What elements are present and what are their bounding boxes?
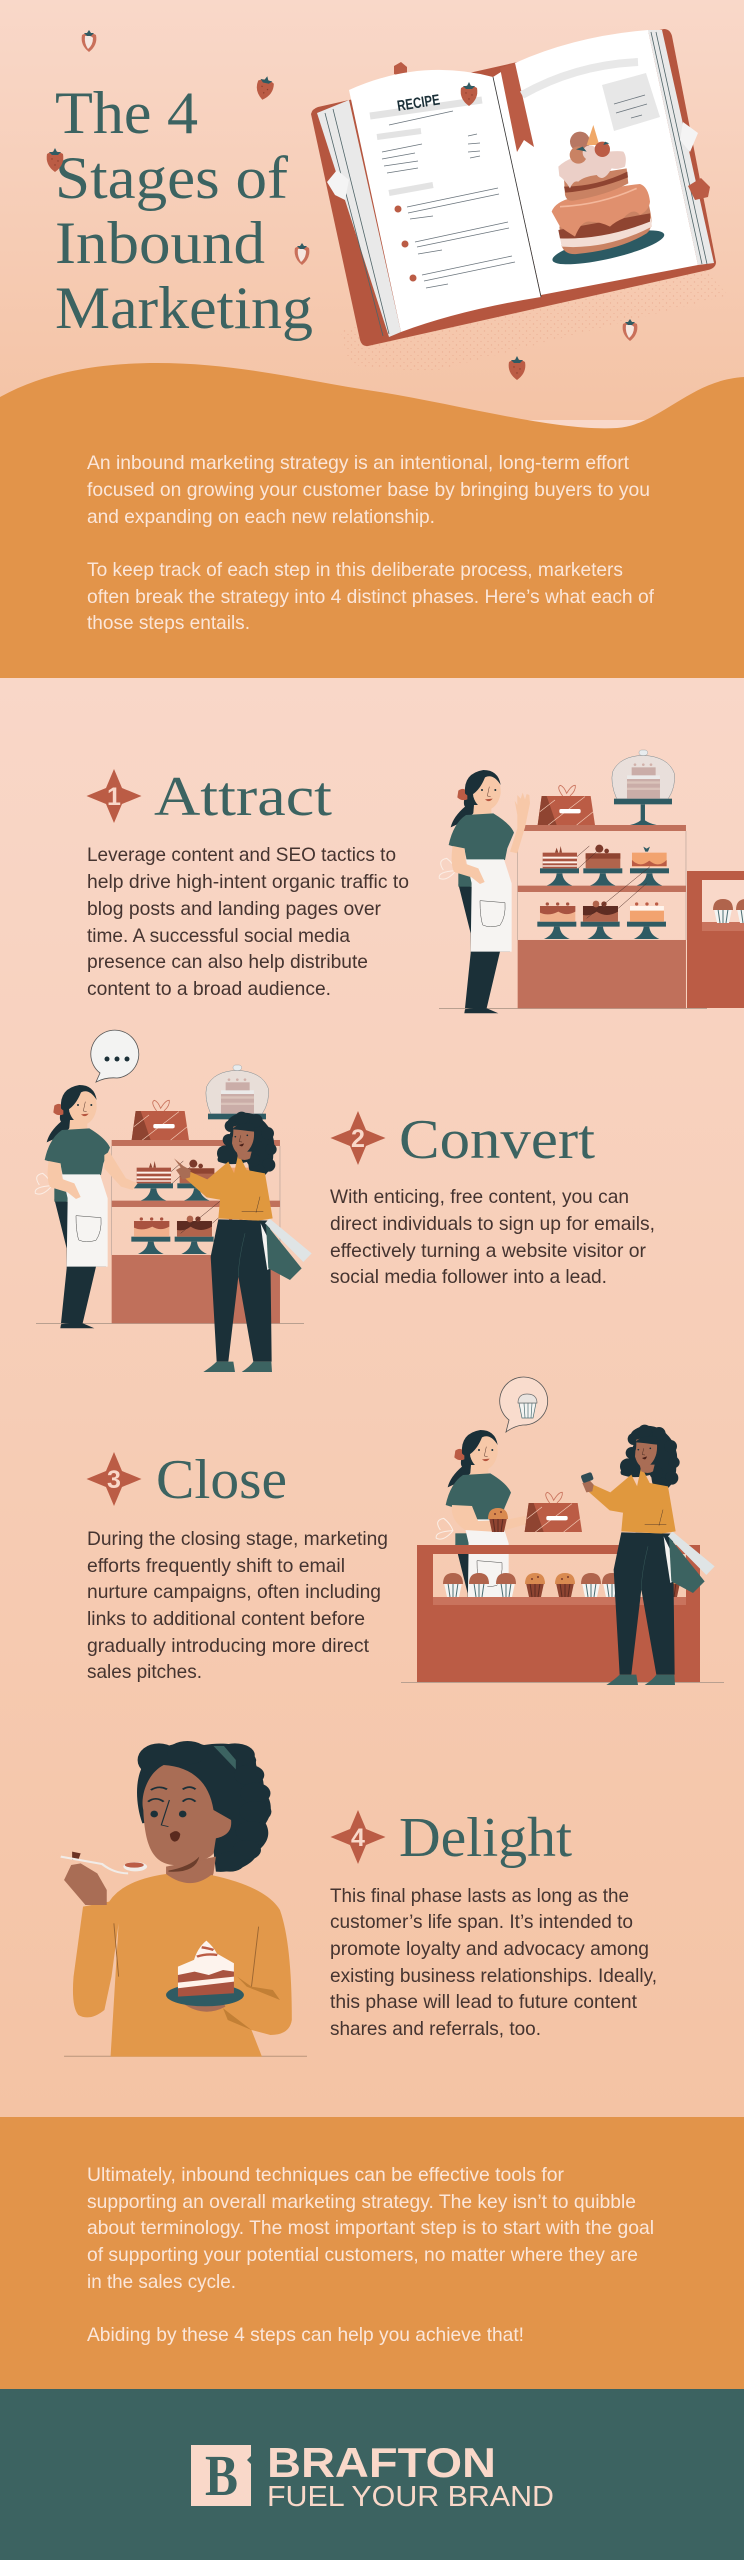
book label: recipe: RECIPE — [396, 91, 441, 115]
text block: attract: time. A successful social media — [87, 925, 350, 947]
text block: conclusion: in the sales cycle. — [87, 2271, 236, 2293]
icon: number 1 star: 1 — [107, 783, 121, 811]
heading: convert: Convert — [399, 1109, 595, 1171]
text block: intro: and expanding on each new relationship. — [87, 506, 435, 528]
text block: attract: presence can also help distribute — [87, 951, 368, 973]
panel: stage 2 convert — [35, 1030, 655, 1372]
text block: conclusion: Ultimately, inbound techniques can be effective tools for — [87, 2164, 564, 2186]
heading: delight: Delight — [399, 1807, 572, 1869]
title: Marketing — [55, 275, 313, 341]
icon: number 2 star: 2 — [351, 1125, 365, 1153]
text block: intro: To keep track of each step in this deliberate process, marketers — [87, 559, 623, 581]
text block: attract — [87, 844, 409, 1000]
panel: intro band — [0, 363, 744, 678]
text block: close: nurture campaigns, often including — [87, 1581, 381, 1603]
text block: conclusion: Abiding by these 4 steps can help you achieve that! — [87, 2324, 524, 2346]
text block: close: During the closing stage, marketing — [87, 1528, 388, 1550]
text block: delight: existing business relationships. Ideally, — [330, 1965, 657, 1987]
illustration: open recipe book — [311, 29, 728, 372]
panel: conclusion band — [0, 2117, 744, 2389]
panel: header — [0, 0, 744, 420]
icon: number 2 star — [330, 1111, 386, 1165]
text block: convert: With enticing, free content, you can — [330, 1186, 629, 1208]
text block: intro — [87, 452, 655, 634]
text block: delight — [330, 1885, 657, 2040]
title: Stages of — [55, 145, 288, 211]
panel: stages background — [0, 678, 744, 2118]
text block: close: efforts frequently shift to email — [87, 1555, 345, 1577]
illustration: woman eating cake — [61, 1741, 307, 2057]
text block: conclusion — [87, 2164, 654, 2346]
logo: brafton: B — [205, 2443, 238, 2508]
text block: close: gradually introducing more direct — [87, 1635, 370, 1657]
text block: attract: content to a broad audience. — [87, 978, 331, 1000]
text block: convert — [330, 1186, 655, 1288]
illustration: baker waving at display case — [439, 750, 744, 1013]
text block: delight: This final phase lasts as long as the — [330, 1885, 629, 1907]
icon: number 4 star: 4 — [351, 1824, 365, 1852]
illustration: layered cake — [550, 125, 667, 271]
heading: close: Close — [156, 1449, 287, 1511]
panel: stage 4 delight — [61, 1741, 657, 2057]
text block: convert: direct individuals to sign up for emails, — [330, 1213, 655, 1235]
title: Inbound — [55, 210, 265, 276]
illustration: customer buying from baker at counter — [401, 1377, 724, 1685]
text block: conclusion: of supporting your potential customers, no matter where they are — [87, 2244, 638, 2266]
text block: attract: Leverage content and SEO tactics to — [87, 844, 396, 866]
logo: brafton — [191, 2439, 554, 2513]
text block: attract: help drive high-intent organic traffic to — [87, 871, 409, 893]
text block: convert: social media follower into a lead. — [330, 1266, 607, 1288]
icon: number 3 star — [86, 1452, 142, 1506]
panel: footer — [0, 2389, 744, 2560]
text block: intro: often break the strategy into 4 distinct phases. Here’s what each of — [87, 586, 655, 608]
text block: attract: blog posts and landing pages over — [87, 898, 381, 920]
text block: conclusion: supporting an overall marketing strategy. The key isn’t to quibble — [87, 2191, 636, 2213]
panel: stage 3 close — [86, 1377, 724, 1685]
speech bubble with cupcake — [500, 1377, 548, 1432]
text block: delight: customer’s life span. It’s intended to — [330, 1911, 633, 1933]
logo: brafton: BRAFTON — [267, 2439, 496, 2486]
title — [55, 80, 313, 341]
speech bubble — [91, 1030, 139, 1082]
text block: close: sales pitches. — [87, 1661, 202, 1683]
icon: number 1 star — [86, 769, 142, 823]
text block: close: links to additional content before — [87, 1608, 365, 1630]
panel: stage 1 attract — [86, 750, 744, 1013]
text block: close — [87, 1528, 388, 1683]
icon: falling strawberries — [82, 30, 637, 380]
text block: conclusion: about terminology. The most important step is to start with the goal — [87, 2217, 654, 2239]
title: The 4 — [55, 80, 198, 146]
text block: intro: those steps entails. — [87, 612, 250, 634]
icon: number 4 star — [330, 1810, 386, 1864]
icon: strawberry on title — [47, 148, 63, 172]
text block: delight: shares and referrals, too. — [330, 2018, 541, 2040]
heading: attract: Attract — [154, 766, 332, 828]
icon: number 3 star: 3 — [107, 1466, 121, 1494]
text block: intro: An inbound marketing strategy is an intentional, long-term effort — [87, 452, 630, 474]
text block: delight: this phase will lead to future content — [330, 1991, 638, 2013]
logo: brafton: FUEL YOUR BRAND — [267, 2481, 554, 2513]
text block: delight: promote loyalty and advocacy among — [330, 1938, 649, 1960]
illustration: baker and customer at display case — [35, 1030, 312, 1372]
text block: intro: focused on growing your customer base by bringing buyers to you — [87, 479, 650, 501]
text block: convert: effectively turning a website visitor or — [330, 1240, 646, 1262]
